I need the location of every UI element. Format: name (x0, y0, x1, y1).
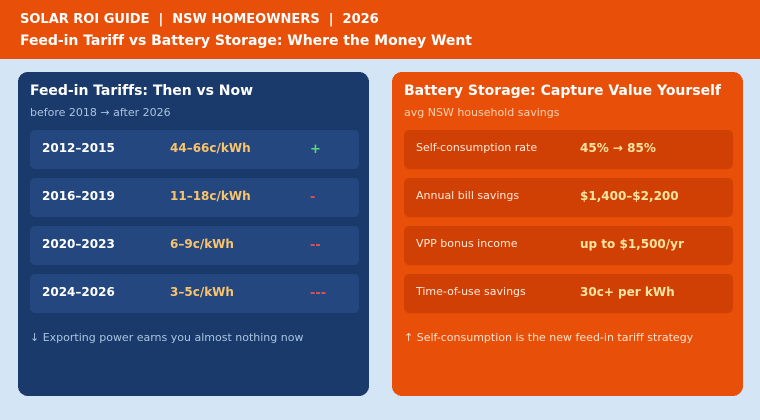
row: annual bill: Annual bill savings (416, 189, 519, 202)
row: 2020-2023 (30, 226, 359, 265)
panel footnote: ↑ Self-consumption is the new feed-in tariff strategy (404, 331, 694, 344)
panel heading: Battery Storage: Capture Value Yourself (404, 83, 722, 99)
panel subheading: before 2018 → after 2026 (30, 106, 171, 119)
row: time-of-use: 30c+ per kWh (580, 285, 675, 299)
row: 2012-2015: 44–66c/kWh (170, 141, 251, 155)
row: 2024-2026: --- (310, 286, 326, 301)
row: VPP: up to $1,500/yr (580, 237, 684, 251)
row: 2016-2019: 2016–2019 (42, 189, 115, 203)
row: 2024-2026 (30, 274, 359, 313)
row: annual bill: $1,400–$2,200 (580, 189, 679, 203)
header kicker: SOLAR ROI GUIDE | NSW HOMEOWNERS | 2026 (20, 12, 379, 27)
row: self-consumption (404, 130, 733, 169)
row: 2016-2019: 11–18c/kWh (170, 189, 251, 203)
header title: Feed-in Tariff vs Battery Storage: Where the Money Went (20, 33, 472, 49)
row: self-consumption: Self-consumption rate (416, 141, 537, 154)
panel heading: Feed-in Tariffs: Then vs Now (30, 83, 253, 99)
panel: feed-in tariffs (18, 72, 369, 396)
panel subheading: avg NSW household savings (404, 106, 560, 119)
row: 2016-2019: - (310, 190, 315, 205)
row: time-of-use: Time-of-use savings (415, 285, 526, 298)
row: 2020-2023: 2020–2023 (42, 237, 115, 251)
row: VPP: VPP bonus income (416, 237, 518, 250)
panel footnote: ↓ Exporting power earns you almost nothing now (30, 331, 303, 344)
row: self-consumption: 45% → 85% (580, 141, 656, 155)
row: time-of-use (404, 274, 733, 313)
header banner (0, 0, 760, 59)
row: 2020-2023: 6–9c/kWh (170, 237, 234, 251)
row: 2016-2019 (30, 178, 359, 217)
row: 2024-2026: 2024–2026 (42, 285, 115, 299)
row: 2012-2015 (30, 130, 359, 169)
row: 2024-2026: 3–5c/kWh (170, 285, 234, 299)
row: annual bill (404, 178, 733, 217)
row: VPP (404, 226, 733, 265)
row: 2012-2015: + (310, 142, 321, 157)
row: 2012-2015: 2012–2015 (42, 141, 115, 155)
row: 2020-2023: -- (310, 238, 321, 253)
panel: battery storage (392, 72, 743, 396)
